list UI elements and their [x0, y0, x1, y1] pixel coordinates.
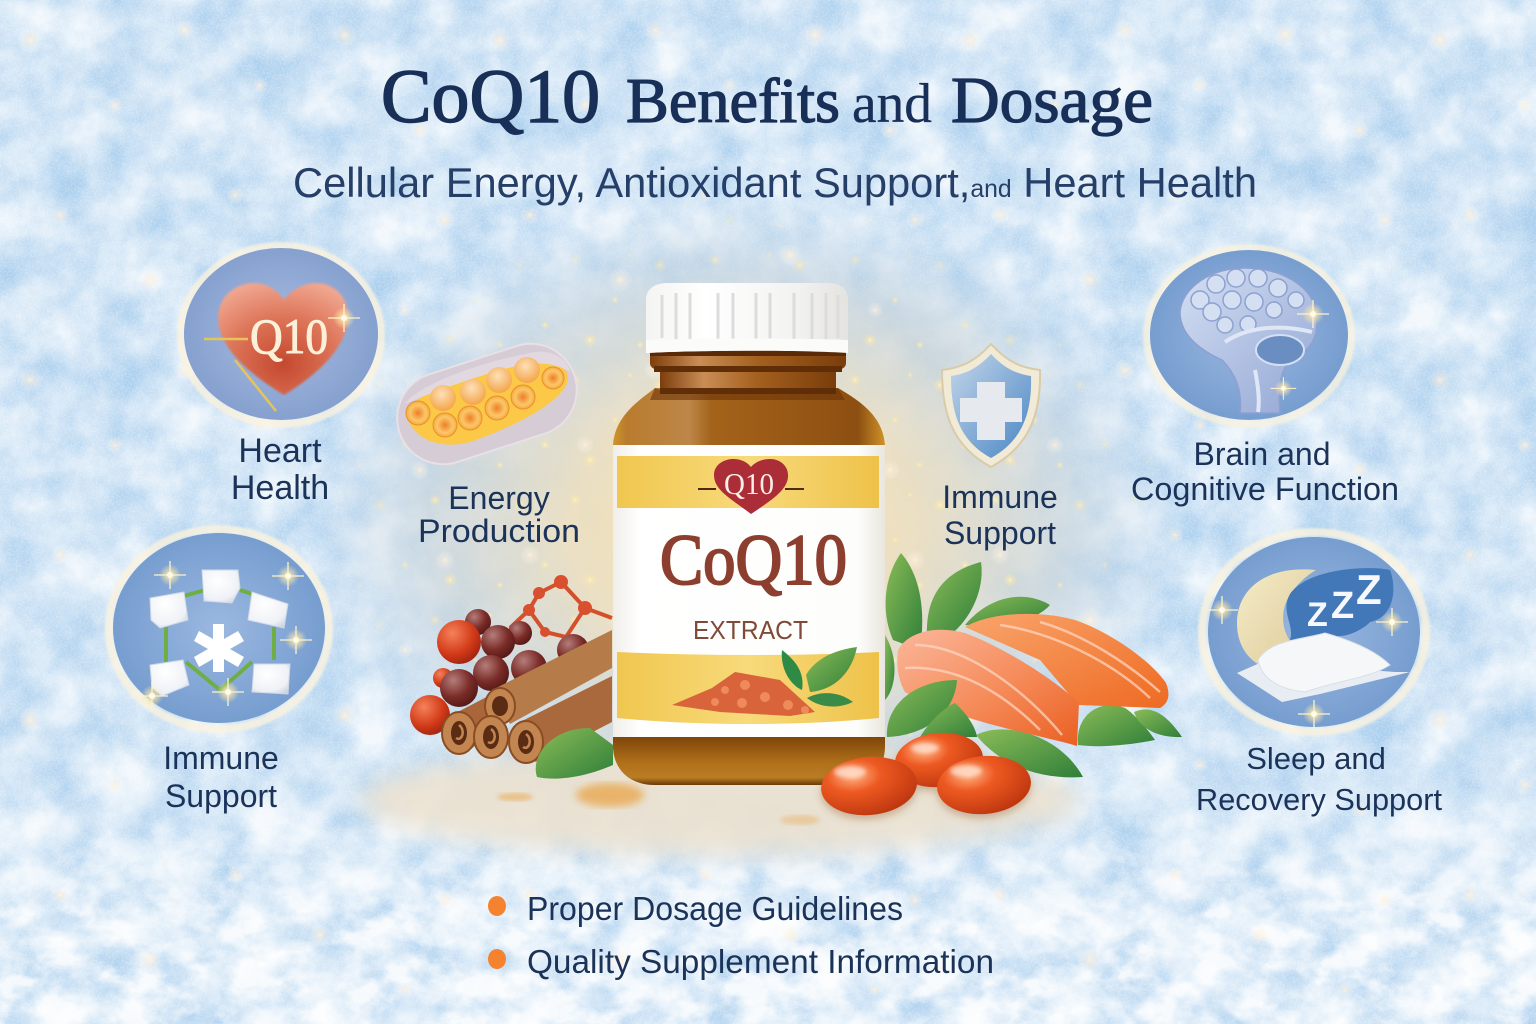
title: CoQ10 — [381, 55, 600, 139]
benefit: immune support (cubes) — [109, 529, 329, 814]
benefit: brain and cognitive function — [1131, 248, 1399, 507]
icon: mitochondrion capsule — [385, 332, 589, 476]
benefit: immune support (shield) — [942, 344, 1058, 551]
label: Sleep and — [1246, 741, 1386, 776]
spice and leaf art — [672, 647, 857, 716]
bullet 2: Quality Supplement Information — [527, 943, 994, 980]
left of salmon leaves — [887, 680, 977, 737]
benefit: heart health: Health — [231, 469, 329, 507]
benefit: immune support (shield): Support — [944, 515, 1056, 551]
label: Heart — [238, 432, 322, 470]
title: Benefits — [626, 65, 840, 136]
benefit: energy production: Production — [418, 513, 580, 549]
benefit: energy production — [385, 332, 589, 549]
benefit: sleep and recovery support: Recovery Support — [1196, 782, 1442, 817]
ground shadow and spice dust — [360, 745, 1080, 855]
title: Dosage — [951, 64, 1153, 137]
leaves behind salmon — [885, 553, 1182, 777]
subtitle: Cellular Energy, Antioxidant Support,and Heart Health — [293, 159, 1257, 206]
heart logo: Q10 — [724, 466, 774, 501]
title — [381, 55, 1153, 139]
icon: immune cubes — [109, 529, 329, 729]
icon: heart with Q10: Q10 — [250, 308, 328, 364]
benefit: sleep and recovery support — [1196, 532, 1442, 817]
bottle base — [613, 735, 885, 785]
molecule — [510, 575, 612, 637]
softgel capsules — [819, 729, 1033, 819]
title: and — [852, 73, 932, 135]
heart logo — [698, 459, 804, 514]
left green leaf — [536, 728, 613, 779]
icon: moon, zzz and pillow — [1202, 532, 1426, 732]
bottle neck — [650, 350, 846, 394]
benefit: immune support (cubes): Support — [165, 778, 277, 814]
extract: EXTRACT — [693, 615, 808, 645]
label: Brain and — [1194, 436, 1330, 472]
label: Immune — [942, 479, 1058, 515]
cinnamon sticks — [442, 630, 612, 763]
icon: moon, zzz and pillow: Z — [1307, 596, 1328, 634]
bottle — [613, 283, 885, 785]
icon: brain — [1147, 248, 1351, 424]
icon: heart with Q10 — [181, 246, 381, 424]
label: Energy — [448, 480, 550, 516]
salmon slices — [897, 614, 1168, 746]
berries — [410, 609, 589, 735]
bottle body — [613, 388, 885, 785]
product name: CoQ10 — [660, 520, 847, 600]
dosage bullet list — [488, 890, 994, 980]
icon: moon, zzz and pillow: Z — [1356, 566, 1382, 613]
icon: shield — [942, 344, 1040, 467]
label: Immune — [163, 740, 279, 776]
bullet 1: Proper Dosage Guidelines — [527, 890, 903, 927]
label — [613, 445, 885, 737]
benefit: heart health — [181, 246, 381, 507]
icon: moon, zzz and pillow: Z — [1331, 585, 1354, 627]
benefit: brain and cognitive function: Cognitive Function — [1131, 471, 1399, 507]
bottle cap — [646, 283, 848, 353]
